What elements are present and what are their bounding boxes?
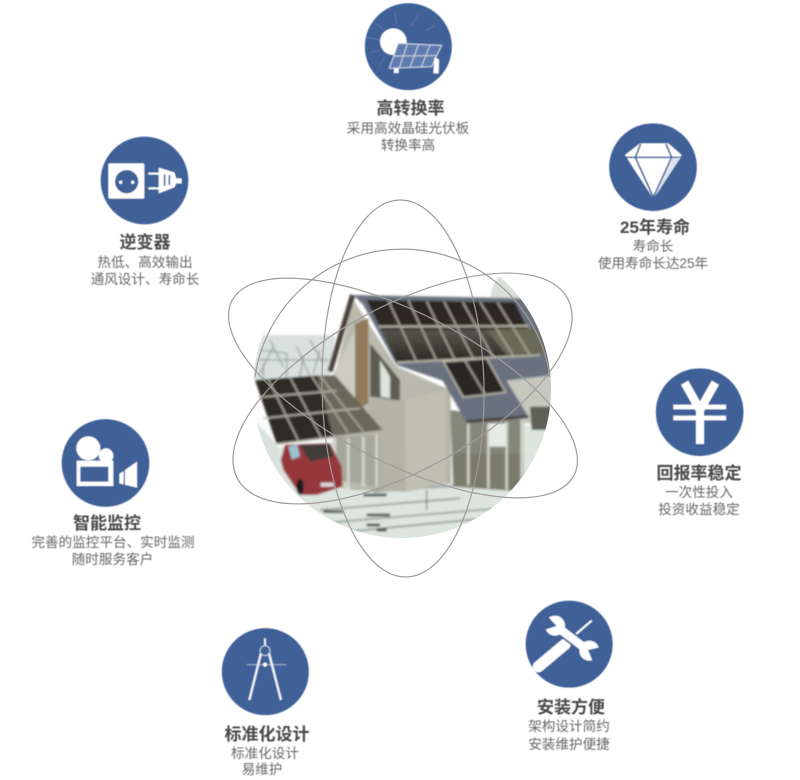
item: easy installation: [526, 601, 613, 752]
carport posts: [333, 435, 380, 487]
gable window: [370, 343, 400, 401]
heading: 回报率稳定: [656, 463, 742, 483]
item: stable returns: [656, 368, 743, 517]
front wall: [442, 386, 452, 484]
glass porch: [450, 410, 523, 492]
gable eave: [330, 295, 353, 372]
item: 25-year lifespan: [598, 123, 708, 271]
central photo: solar house: [254, 276, 551, 538]
red car: [281, 443, 343, 495]
icon: camera: [62, 419, 149, 507]
description: 寿命长: [633, 238, 674, 254]
description: 投资收益稳定: [658, 502, 740, 517]
item: standardized design: [222, 628, 310, 777]
main roof: [353, 295, 553, 423]
item: high conversion rate: [347, 3, 470, 153]
description: 热低、高效输出: [97, 254, 193, 270]
description: 安装维护便捷: [528, 737, 610, 752]
icon: drafting compass: [222, 628, 309, 715]
icon: solar panel and sun: [365, 3, 452, 90]
description: 采用高效晶硅光伏板: [347, 120, 470, 136]
description: [231, 746, 299, 777]
icon: socket and plug: [101, 137, 188, 224]
dome behind the house: [490, 276, 520, 298]
heading: 25年寿命: [620, 217, 690, 237]
orbit lines around the photo: [198, 199, 608, 578]
description: 完善的监控平台、实时监测: [31, 535, 195, 550]
icon: yen symbol: [656, 368, 743, 456]
icon: wrench and screwdriver: [526, 601, 613, 688]
heading: 安装方便: [537, 697, 605, 717]
description: 架构设计简约: [528, 718, 610, 734]
gable wall: [336, 301, 443, 492]
description: [658, 485, 740, 517]
sketch background: [253, 335, 335, 380]
description: 一次性投入: [665, 485, 733, 500]
icon: diamond: [609, 123, 697, 211]
timber strip: [355, 318, 368, 410]
description: 使用寿命长达25年: [598, 255, 708, 271]
description: [31, 535, 195, 567]
blueprint ground: [253, 423, 553, 543]
heading: 逆变器: [120, 232, 170, 252]
description: [91, 254, 200, 287]
description: 随时服务客户: [72, 551, 153, 567]
description: 转换率高: [381, 137, 435, 153]
carport panels: [254, 374, 334, 444]
item: inverter: [91, 137, 200, 287]
heading: 高转换率: [376, 98, 444, 118]
roof panels: [367, 300, 540, 363]
item: smart monitoring: [31, 419, 195, 567]
heading: 智能监控: [73, 513, 141, 533]
description: [347, 120, 470, 153]
right wing of the house: [506, 374, 551, 424]
description: [598, 238, 708, 271]
heading: 标准化设计: [224, 724, 310, 744]
description: 通风设计、寿命长: [91, 271, 200, 287]
description: 易维护: [242, 762, 282, 777]
description: [528, 718, 610, 752]
description: 标准化设计: [231, 746, 299, 761]
